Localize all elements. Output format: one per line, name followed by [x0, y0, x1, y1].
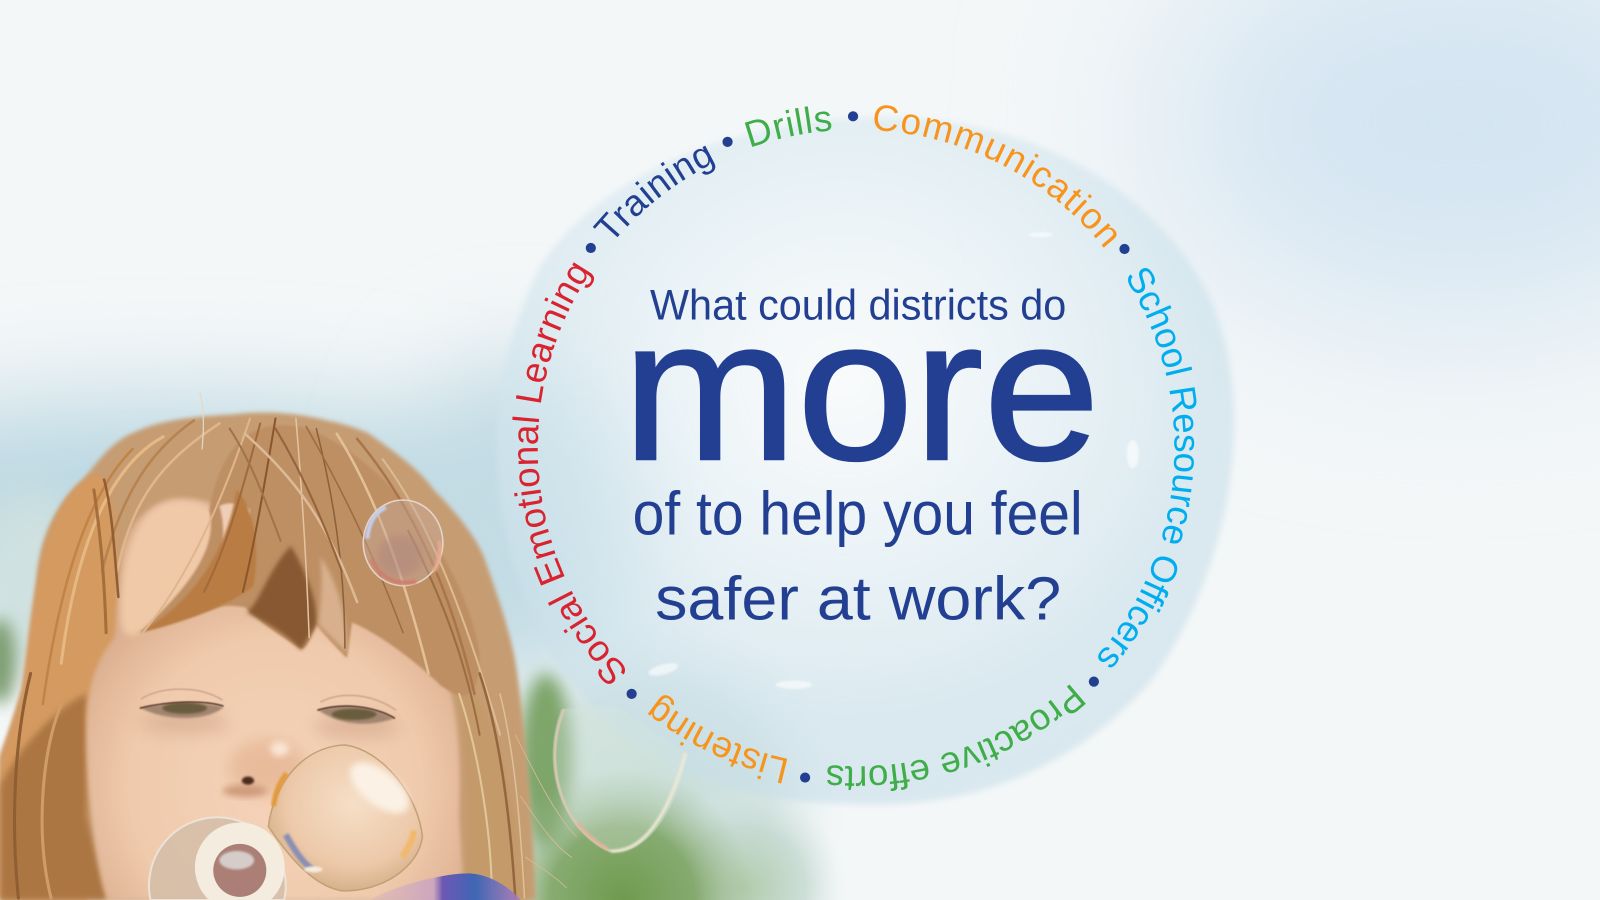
separator dot	[586, 243, 596, 253]
left lower dark hair	[0, 694, 107, 900]
separator dot	[800, 772, 810, 783]
small bubble on hair	[363, 500, 443, 586]
ring label: Social Emotional Learning: Social Emotional Learning	[512, 262, 632, 699]
ring label: Drills: Drills	[744, 106, 832, 147]
central question	[622, 276, 1100, 632]
mouth bubble	[268, 745, 422, 891]
separator dot	[722, 137, 733, 147]
question line 1: What could districts do	[650, 281, 1066, 329]
left orange lock	[0, 474, 120, 900]
eye socket shadows	[139, 711, 400, 738]
ring label: School Resource Officers: School Resource Officers	[1098, 268, 1196, 668]
forehead patch	[120, 500, 219, 635]
nose	[222, 739, 306, 797]
large soap bubble	[497, 117, 1234, 805]
headline word: more: more	[622, 276, 1100, 502]
ring label: Training: Training	[592, 146, 716, 238]
fringe	[140, 425, 480, 696]
right eye	[317, 695, 396, 724]
lower bubble outline	[553, 704, 687, 852]
right hair length	[449, 653, 529, 900]
purple bubble	[370, 873, 520, 900]
question line 3: of to help you feel	[633, 480, 1083, 548]
hair mass	[0, 412, 536, 900]
separator dot	[1119, 244, 1130, 254]
orange fringe wedge	[140, 490, 256, 633]
pale skin seen through right fringe	[318, 556, 347, 653]
hair strands	[15, 393, 577, 898]
ring bubble	[149, 817, 286, 900]
dark fringe core	[247, 546, 317, 650]
left eye	[140, 689, 223, 718]
pink skin strip in fringe	[216, 503, 250, 580]
separator dot	[627, 689, 637, 699]
ring label: Proactive efforts: Proactive efforts	[827, 684, 1086, 791]
ring label: Communication: Communication	[874, 105, 1117, 248]
face	[86, 500, 464, 900]
circular text ring	[512, 105, 1196, 791]
ring label: Listening: Listening	[648, 695, 788, 784]
separator dot	[848, 111, 858, 121]
photo: child blowing bubbles	[0, 393, 577, 900]
question line 4: safer at work?	[655, 564, 1061, 632]
bubble highlights	[647, 232, 1139, 689]
separator dot	[1089, 677, 1099, 687]
